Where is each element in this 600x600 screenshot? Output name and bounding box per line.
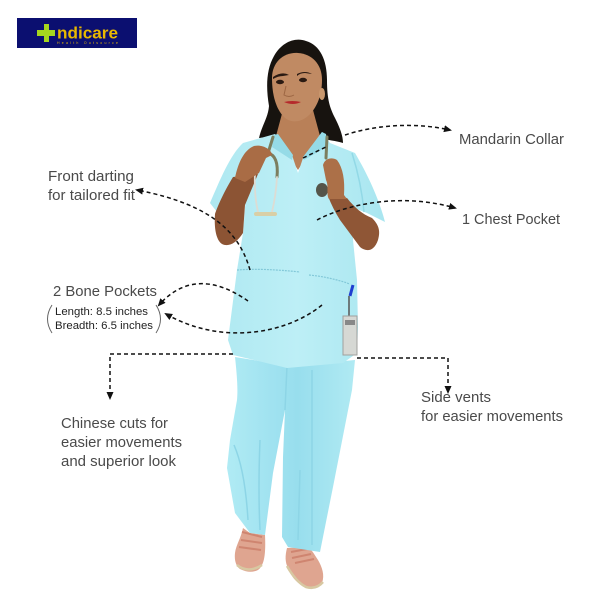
scrub top — [210, 132, 385, 368]
left shoe laces — [239, 532, 262, 550]
logo wordmark: ndicare — [57, 24, 118, 42]
shoe soles — [237, 565, 323, 588]
ear — [319, 88, 325, 100]
eyebrows and eyes — [273, 72, 312, 84]
right hand — [323, 158, 347, 199]
left arm — [215, 174, 258, 245]
left hand — [235, 146, 272, 182]
ID badge — [343, 316, 357, 355]
label: front darting: Front darting — [48, 169, 134, 185]
arrow: mandarin collar — [303, 125, 450, 158]
lips — [284, 101, 301, 104]
collar — [272, 132, 328, 160]
arrow: side vents — [357, 358, 448, 392]
arrow: front darting — [137, 190, 250, 270]
stethoscope — [255, 137, 328, 214]
label: side vents — [421, 390, 563, 425]
logo tagline: Health Outsource — [57, 41, 118, 45]
label: front darting — [48, 169, 135, 204]
nose — [284, 86, 294, 96]
label: front darting: for tailored fit — [48, 188, 135, 204]
label: chinese cuts: and superior look — [61, 454, 177, 470]
label: side vents: Side vents — [421, 390, 491, 406]
ID lanyard clip — [350, 285, 353, 296]
label: bone pockets: 2 Bone Pockets — [53, 284, 157, 300]
label: chinese cuts: easier movements — [61, 435, 182, 451]
brackets — [48, 305, 160, 333]
label: chest pocket: 1 Chest Pocket — [462, 212, 560, 228]
pocket dimensions: Length: 8.5 inches — [55, 306, 149, 318]
pocket seams — [237, 269, 350, 284]
right sleeve shading — [352, 153, 364, 212]
label: side vents: for easier movements — [421, 409, 563, 425]
label: chinese cuts: Chinese cuts for — [61, 416, 168, 432]
neck — [276, 110, 320, 170]
label: mandarin collar: Mandarin Collar — [459, 132, 564, 148]
person figure — [210, 40, 385, 588]
pants folds — [234, 366, 312, 545]
logo — [17, 18, 137, 48]
arrow: chest pocket — [317, 201, 455, 220]
label: bone pockets: Breadth: 6.5 inches — [55, 320, 154, 332]
left shoe — [235, 528, 265, 572]
hair — [259, 40, 343, 143]
right arm — [328, 196, 379, 250]
arrow: lower bone pocket — [166, 305, 322, 333]
label: chinese cuts — [61, 416, 182, 470]
arrow: upper bone pocket — [159, 284, 248, 305]
ID lanyard cord — [348, 296, 350, 316]
icon: green medical cross — [37, 24, 55, 42]
face — [272, 53, 322, 121]
pants — [227, 357, 355, 552]
right shoe — [286, 547, 323, 588]
right shoe laces — [291, 549, 314, 563]
label: bone pockets — [48, 284, 160, 333]
arrow: chinese cuts — [110, 354, 233, 398]
